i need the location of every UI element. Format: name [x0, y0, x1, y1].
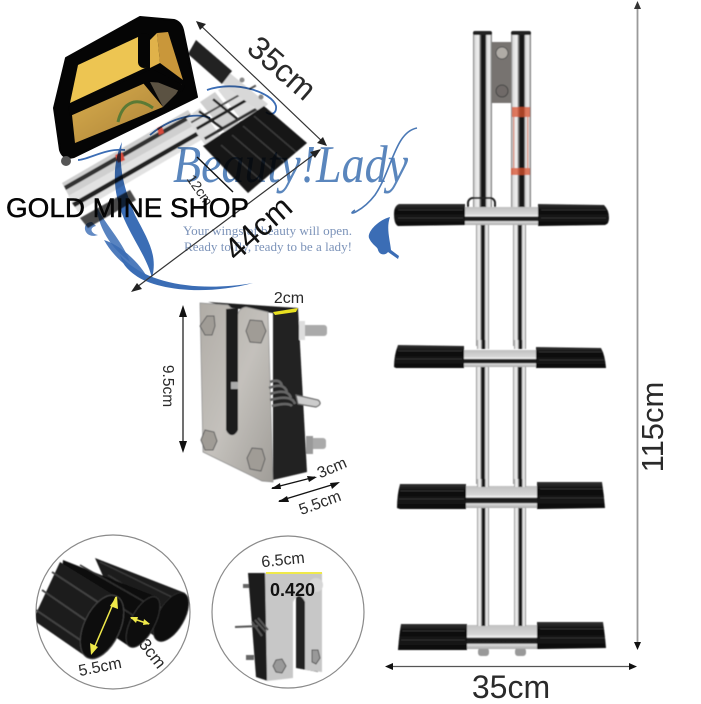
tagline: Ready to fly, ready to be a lady! — [184, 240, 352, 254]
bracket rear studs — [299, 321, 327, 454]
lower tubes — [476, 224, 526, 625]
logo slot — [138, 33, 150, 68]
bracket side and studs — [235, 573, 323, 681]
bracket dimension: 9.5cm: 9.5cm — [159, 365, 176, 407]
dimension arrow: 44cm diagonal — [131, 149, 321, 292]
bracket steel plate — [200, 303, 273, 482]
yellow line — [266, 572, 322, 574]
step 1 — [394, 204, 609, 226]
bracket dimension: 9.5cm — [159, 305, 187, 453]
tagline: Your wings of beauty will open. — [183, 224, 352, 238]
bracket dimension: 5.5cm — [278, 482, 344, 519]
detail circle: rubber steps — [33, 535, 196, 689]
label: 44cm diagonal: 44cm — [217, 188, 299, 268]
folded ladder tubes — [62, 110, 208, 228]
main ladder photo — [394, 31, 609, 656]
bracket dimension: 3cm: 3cm — [315, 455, 349, 482]
bolts at foot — [478, 648, 526, 656]
folded ladder crossbars — [186, 70, 268, 152]
label: 115cm: 115cm — [635, 382, 670, 472]
warning stickers — [511, 107, 530, 175]
script name: Beauty!Lady — [173, 136, 408, 194]
dimension arrow: 35cm width — [385, 663, 637, 670]
collar — [468, 198, 495, 212]
watermark: Beauty Lady — [78, 86, 417, 290]
label: 6.5cm: 6.5cm — [260, 550, 306, 571]
mounting plate — [491, 42, 512, 103]
bracket dimension: 5.5cm: 5.5cm — [297, 488, 344, 519]
logo gold bottom — [72, 83, 163, 143]
bracket dimension: 3cm — [271, 455, 349, 489]
label: 3cm: 3cm — [135, 635, 170, 672]
logo band — [68, 69, 185, 116]
bracket dimension: 2cm: 2cm — [274, 290, 304, 307]
logo knob — [61, 156, 71, 166]
logo gold side — [157, 32, 183, 80]
label: 35cm width: 35cm — [472, 669, 550, 704]
bracket dimension: 2cm — [273, 290, 304, 315]
detail circle: bracket front — [212, 536, 364, 688]
step 3 — [397, 482, 605, 509]
folded ladder rubber steps — [188, 40, 307, 193]
dimension arrow: 115cm height — [634, 1, 641, 650]
label: 0.42: 0.420 — [270, 580, 315, 600]
folded ladder photo — [62, 40, 307, 228]
mounting bracket photo — [200, 302, 327, 482]
logo black frame — [54, 17, 197, 158]
dimension arrow: 35cm diagonal — [196, 21, 327, 146]
bracket slot — [226, 308, 238, 435]
logo gold top — [70, 37, 147, 103]
icon: butterfly — [369, 217, 399, 259]
yellow arrows — [90, 596, 150, 655]
rubber cylinders — [33, 558, 196, 665]
tube feet — [476, 340, 526, 626]
dimension arrow and label: 12cm: 12cm — [184, 171, 216, 209]
logo green flourish — [118, 102, 153, 122]
script tail — [352, 128, 417, 213]
bracket bolts — [200, 316, 266, 471]
logo: gold bar — [54, 17, 197, 166]
tagline — [183, 224, 352, 254]
dimension arrow and label: 12cm — [184, 157, 233, 209]
upper tubes — [473, 31, 531, 210]
bracket spring — [269, 381, 320, 407]
label: 35cm diagonal: 35cm — [241, 29, 323, 107]
step 4 — [398, 622, 606, 650]
thin swirls — [78, 86, 276, 160]
shop name: GOLD MINE SHOP — [6, 193, 249, 223]
step 2 — [394, 345, 606, 368]
label: 5.5cm: 5.5cm — [77, 655, 123, 680]
flourish — [85, 142, 253, 290]
bracket black side — [273, 308, 307, 480]
